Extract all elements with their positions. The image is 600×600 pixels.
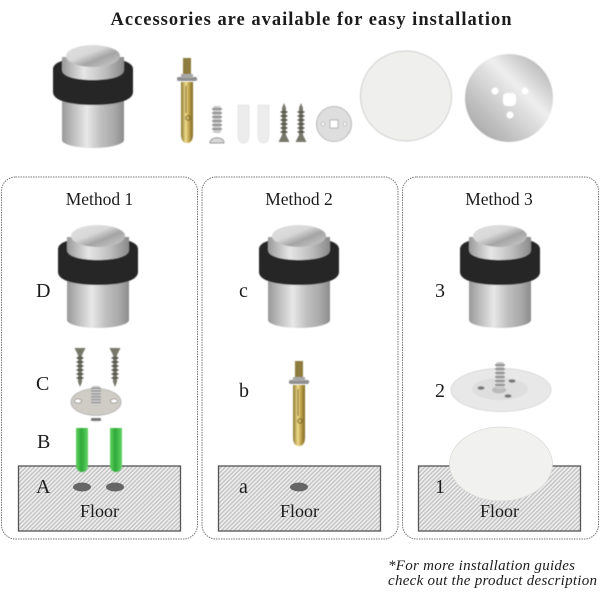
heading: method 2: Method 2 (265, 189, 333, 209)
screws and mounting plate (71, 348, 121, 421)
floor label: Floor (280, 501, 319, 521)
icon: screw 1 (278, 103, 290, 142)
step a label: a (239, 476, 248, 498)
panel: method 3 (402, 177, 598, 539)
step b label: b (239, 380, 249, 402)
metal disc with threaded stud (451, 362, 551, 412)
floor (418, 466, 580, 531)
door stopper (460, 225, 540, 328)
drill hole (290, 482, 308, 492)
step c label: c (239, 280, 248, 302)
icon: spring screw (210, 106, 224, 143)
icon: metal disc (465, 54, 553, 142)
footnote: check out the product description (388, 573, 597, 589)
step 1 label: 1 (435, 476, 445, 498)
white adhesive disc (450, 427, 552, 501)
footnote: *For more installation guides (388, 558, 575, 574)
door stopper (58, 225, 138, 328)
panel: method 2 (202, 177, 398, 539)
icon: door stopper (53, 45, 133, 148)
floor label: Floor (480, 501, 519, 521)
step C label: C (36, 373, 49, 395)
step 3 label: 3 (435, 280, 445, 302)
footnote (388, 558, 597, 589)
expansion bolt (289, 361, 309, 446)
accessories row (53, 45, 553, 148)
panel: method 1 (2, 177, 198, 539)
step B label: B (37, 431, 50, 453)
step A label: A (36, 476, 51, 498)
step 2 label: 2 (435, 380, 445, 402)
icon: screw 2 (296, 103, 306, 142)
icon: expansion bolt (177, 58, 197, 143)
icon: white adhesive disc (360, 51, 452, 141)
heading: method 3: Method 3 (465, 189, 533, 209)
title: Accessories are available for easy installation (110, 10, 512, 30)
icon: small round plate (316, 106, 352, 142)
step D label: D (36, 280, 50, 302)
icon: wall plug 1 (238, 105, 249, 143)
door stopper (259, 225, 339, 328)
floor label: Floor (80, 501, 119, 521)
heading: method 1: Method 1 (66, 189, 133, 209)
drill holes (73, 482, 124, 492)
floor (218, 466, 380, 531)
icon: wall plug 2 (258, 105, 269, 143)
green wall plugs (76, 428, 122, 472)
floor (18, 466, 180, 531)
